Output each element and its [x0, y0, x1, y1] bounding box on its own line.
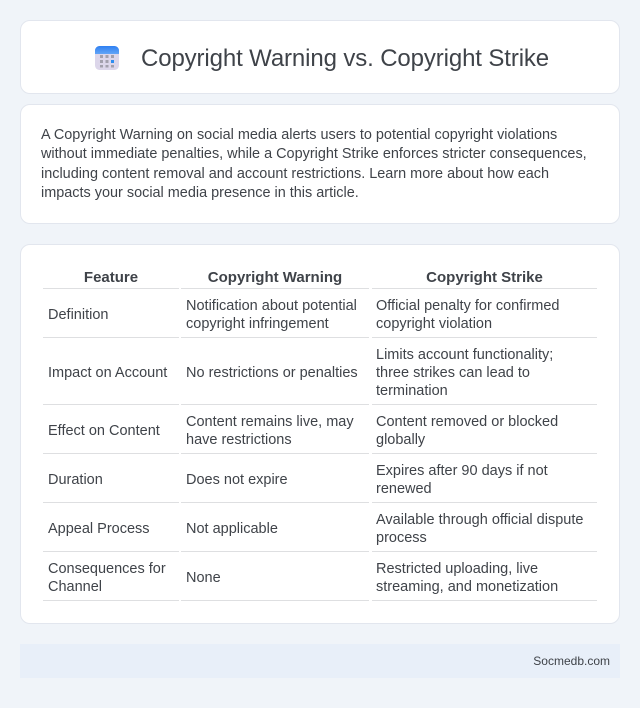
intro card	[20, 104, 620, 224]
comparison table: streaming, and monetization	[376, 579, 558, 595]
comparison table: Limits account functionality;	[376, 347, 553, 363]
icon: calendar	[95, 46, 119, 70]
comparison table: None	[186, 570, 221, 586]
row: Duration: Duration	[48, 472, 103, 488]
header: Copyright Warning: Copyright Warning	[208, 269, 342, 286]
comparison table: Restricted uploading, live	[376, 561, 538, 577]
comparison table: renewed	[376, 481, 432, 497]
row: Effect on Content: Effect on Content	[48, 423, 160, 439]
comparison table: Content remains live, may	[186, 414, 354, 430]
table card	[20, 244, 620, 624]
intro text: including content removal and account restrictions. Learn more about how each	[41, 166, 549, 182]
comparison table: Does not expire	[186, 472, 288, 488]
comparison table	[43, 269, 597, 601]
row: Definition: Definition	[48, 307, 108, 323]
comparison table: termination	[376, 383, 448, 399]
comparison table: Expires after 90 days if not	[376, 463, 548, 479]
comparison table: process	[376, 530, 427, 546]
comparison table: Not applicable	[186, 521, 278, 537]
comparison table: copyright violation	[376, 316, 492, 332]
row: Impact on Account: Impact on Account	[48, 365, 167, 381]
row: Appeal Process: Appeal Process	[48, 521, 150, 537]
comparison table: Notification about potential	[186, 298, 357, 314]
comparison table: Channel	[48, 579, 102, 595]
comparison table: Official penalty for confirmed	[376, 298, 559, 314]
comparison table: Content removed or blocked	[376, 414, 558, 430]
header: Feature: Feature	[84, 269, 138, 286]
comparison table: Available through official dispute	[376, 512, 583, 528]
comparison table: globally	[376, 432, 425, 448]
footer text: Socmedb.com	[533, 654, 610, 668]
comparison table: three strikes can lead to	[376, 365, 530, 381]
intro text: without immediate penalties, while a Copyright Strike enforces stricter consequences,	[41, 146, 587, 162]
intro text: impacts your social media presence in this article.	[41, 185, 359, 201]
comparison table: copyright infringement	[186, 316, 329, 332]
footer bar	[20, 644, 620, 678]
comparison table: have restrictions	[186, 432, 292, 448]
row: Consequences for Channel: Consequences for	[48, 561, 166, 577]
title: Copyright Warning vs. Copyright Strike	[141, 45, 549, 72]
title card	[20, 20, 620, 94]
intro text	[41, 127, 587, 201]
comparison table: No restrictions or penalties	[186, 365, 358, 381]
intro text: A Copyright Warning on social media alerts users to potential copyright violations	[41, 127, 557, 143]
header: Copyright Strike: Copyright Strike	[426, 269, 543, 286]
